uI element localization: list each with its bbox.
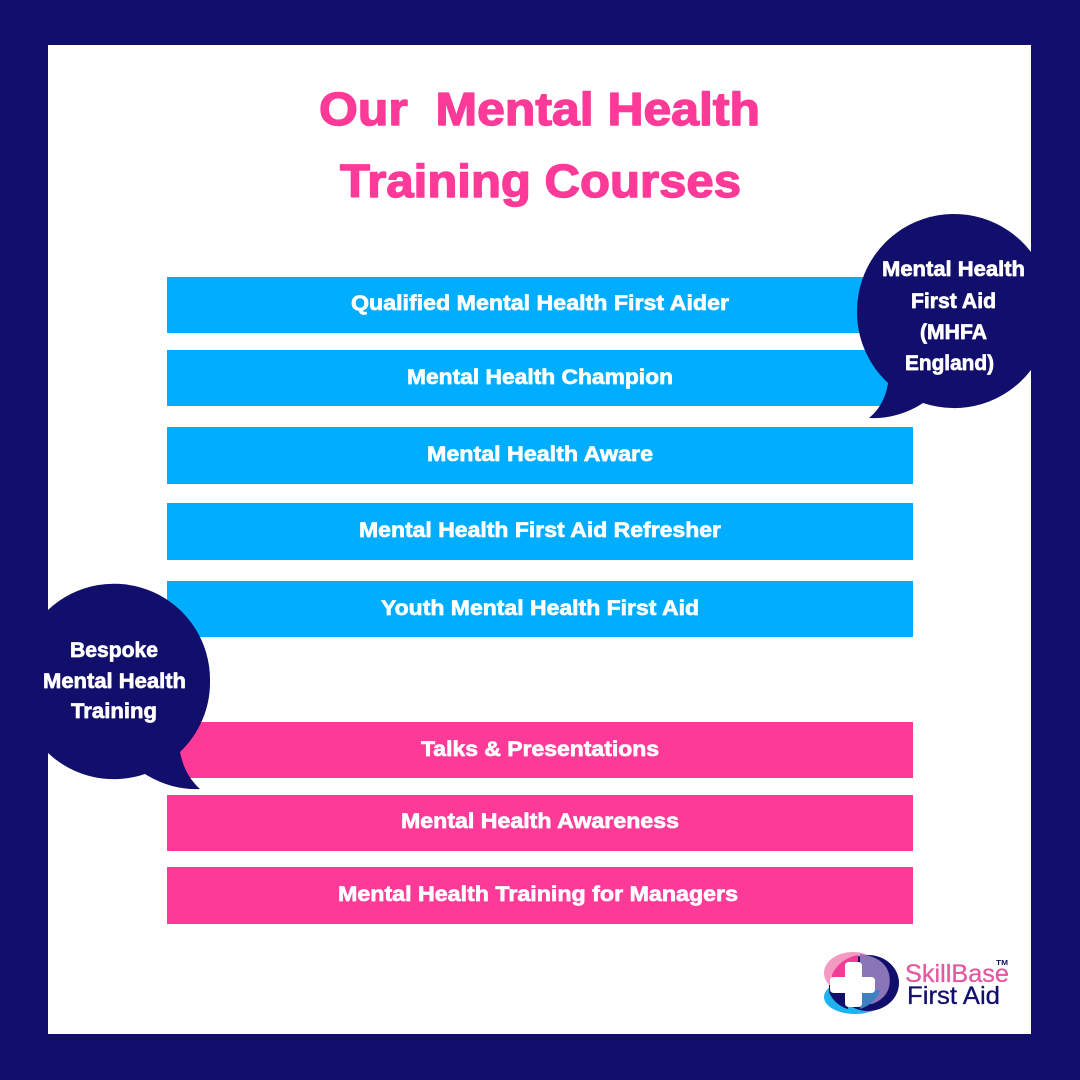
logo icon: cross on overlapping blobs — [824, 952, 899, 1014]
course bar: Youth Mental Health First Aid: Youth Mental Health First Aid — [381, 596, 699, 620]
course bar: Talks & Presentations — [167, 722, 913, 778]
course bar: Mental Health Awareness — [167, 795, 913, 851]
course bar: Mental Health Awareness: Mental Health Awareness — [401, 809, 679, 833]
course bar: Mental Health First Aid Refresher: Mental Health First Aid Refresher — [359, 518, 722, 542]
course bar: Mental Health Champion — [167, 350, 913, 406]
course bar: Mental Health Aware: Mental Health Aware — [427, 442, 653, 466]
speech bubble: Mental Health First Aid (MHFA England) — [857, 214, 1031, 418]
speech bubble: Bespoke Mental Health Training — [43, 584, 210, 789]
logo wordmark: SkillBase — [905, 960, 1009, 988]
speech bubble: Bespoke Mental Health Training: Training — [71, 699, 157, 723]
course bar: Qualified Mental Health First Aider — [167, 277, 913, 333]
course bar: Mental Health Aware — [167, 427, 913, 484]
logo: SkillBase First Aid — [824, 952, 1009, 1014]
logo: SkillBase First Aid: TM — [996, 960, 1008, 967]
course bar: Qualified Mental Health First Aider: Qualified Mental Health First Aider — [351, 291, 730, 315]
speech bubble: Mental Health First Aid (MHFA England): (MHFA — [920, 320, 987, 344]
course bar: Mental Health Training for Managers: Mental Health Training for Managers — [338, 882, 738, 906]
logo: SkillBase First Aid: First Aid — [907, 982, 1000, 1010]
course bar: Mental Health Champion: Mental Health Champion — [407, 365, 673, 389]
speech bubble: Bespoke Mental Health Training: Mental Health — [43, 669, 186, 693]
speech bubble: Mental Health First Aid (MHFA England): England) — [905, 351, 994, 375]
title: Training Courses — [340, 155, 741, 207]
title: Our Mental Health — [319, 83, 760, 135]
course bar: Youth Mental Health First Aid — [167, 581, 913, 637]
title — [319, 83, 760, 207]
course bar: Mental Health First Aid Refresher — [167, 503, 913, 560]
speech bubble: Mental Health First Aid (MHFA England): Mental Health — [882, 257, 1025, 281]
course bar: Talks & Presentations: Talks & Presentations — [421, 737, 659, 761]
speech bubble: Mental Health First Aid (MHFA England): First Aid — [911, 289, 996, 313]
speech bubble: Bespoke Mental Health Training: Bespoke — [70, 638, 158, 662]
course bar: Mental Health Training for Managers — [167, 867, 913, 924]
